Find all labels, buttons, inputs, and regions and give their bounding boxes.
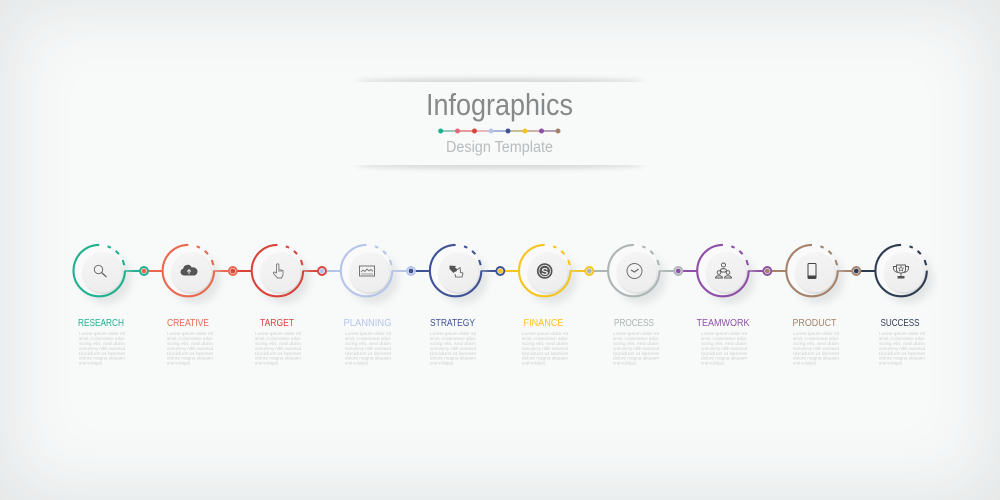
text block: amet, consectetuer adipi-: [255, 336, 301, 341]
text block: amet, consectetuer adipi-: [345, 336, 391, 341]
text block: scing elit, sed diam: [167, 341, 213, 346]
text block: Lorem ipsum dolor sit: [255, 331, 302, 336]
icon: trophy: [893, 265, 909, 278]
colour dot line: [438, 128, 560, 134]
text block: nonummy nibh euismod: [613, 346, 659, 351]
text block: scing elit, sed diam: [879, 341, 925, 346]
panel: process: [608, 245, 666, 366]
heading: TARGET: [260, 317, 294, 329]
text block: Lorem ipsum dolor sit: [345, 331, 392, 336]
text block: tincidunt ut laoreet: [255, 351, 302, 356]
text block: erat volutpat.: [167, 361, 191, 366]
heading: RESEARCH: [78, 317, 124, 329]
text block: nonummy nibh euismod: [79, 346, 125, 351]
text block: dolore magna aliquam: [255, 356, 301, 361]
ring and disc: [697, 245, 755, 304]
text block: Lorem ipsum dolor sit: [701, 331, 748, 336]
icon: strategy arrows: [450, 266, 463, 277]
text block: erat volutpat.: [879, 361, 903, 366]
text block: tincidunt ut laoreet: [167, 351, 214, 356]
panel: target: [252, 245, 309, 366]
icon: magnifier: [94, 265, 106, 277]
subtitle: Design Template: [446, 139, 553, 156]
text block: nonummy nibh euismod: [701, 346, 747, 351]
text block: amet, consectetuer adipi-: [522, 336, 568, 341]
panel: product: [786, 245, 844, 366]
ring and disc: [252, 245, 309, 304]
ring and disc: [786, 245, 844, 304]
text block: tincidunt ut laoreet: [879, 351, 926, 356]
text block: [701, 331, 748, 366]
text block: [79, 331, 126, 366]
icon: smartphone: [808, 264, 816, 278]
text block: dolore magna aliquam: [345, 356, 391, 361]
text block: [613, 331, 660, 366]
text block: scing elit, sed diam: [613, 341, 659, 346]
text block: tincidunt ut laoreet: [430, 351, 477, 356]
text block: Lorem ipsum dolor sit: [522, 331, 569, 336]
text block: scing elit, sed diam: [793, 341, 839, 346]
text block: [879, 331, 926, 366]
text block: nonummy nibh euismod: [430, 346, 476, 351]
text block: nonummy nibh euismod: [255, 346, 301, 351]
text block: scing elit, sed diam: [701, 341, 747, 346]
ring and disc: [519, 245, 577, 304]
icon: team: [716, 263, 732, 278]
text block: tincidunt ut laoreet: [79, 351, 126, 356]
panel: planning: [341, 245, 398, 366]
text block: tincidunt ut laoreet: [522, 351, 569, 356]
panel: success: [875, 245, 933, 366]
text block: Lorem ipsum dolor sit: [79, 331, 126, 336]
heading: STRATEGY: [430, 317, 475, 329]
text block: nonummy nibh euismod: [793, 346, 839, 351]
panel: finance: [519, 245, 577, 366]
icon: line chart: [360, 266, 374, 276]
text block: amet, consectetuer adipi-: [879, 336, 925, 341]
text block: [430, 331, 477, 366]
text block: [345, 331, 392, 366]
text block: nonummy nibh euismod: [167, 346, 213, 351]
icon: clock: [627, 264, 642, 278]
text block: dolore magna aliquam: [879, 356, 925, 361]
heading: CREATIVE: [167, 317, 209, 329]
text block: tincidunt ut laoreet: [613, 351, 660, 356]
top brush stroke: [359, 76, 641, 82]
panel: creative: [163, 245, 220, 366]
icon: dollar coin: S: [541, 266, 548, 278]
text block: Lorem ipsum dolor sit: [430, 331, 477, 336]
text block: Lorem ipsum dolor sit: [879, 331, 926, 336]
text block: dolore magna aliquam: [522, 356, 568, 361]
text block: Lorem ipsum dolor sit: [167, 331, 214, 336]
text block: tincidunt ut laoreet: [701, 351, 748, 356]
text block: nonummy nibh euismod: [879, 346, 925, 351]
text block: amet, consectetuer adipi-: [701, 336, 747, 341]
text block: scing elit, sed diam: [522, 341, 568, 346]
heading: TEAMWORK: [696, 317, 750, 329]
text block: erat volutpat.: [701, 361, 725, 366]
infographic canvas: [72, 76, 934, 366]
header: title block: [355, 78, 645, 169]
text block: [522, 331, 569, 366]
text block: dolore magna aliquam: [79, 356, 125, 361]
text block: scing elit, sed diam: [345, 341, 391, 346]
text block: tincidunt ut laoreet: [345, 351, 392, 356]
text block: [167, 331, 214, 366]
text block: erat volutpat.: [522, 361, 546, 366]
ring and disc: [163, 245, 220, 304]
text block: scing elit, sed diam: [255, 341, 301, 346]
heading: PRODUCT: [792, 317, 837, 329]
text block: erat volutpat.: [255, 361, 279, 366]
text block: nonummy nibh euismod: [345, 346, 391, 351]
text block: scing elit, sed diam: [430, 341, 476, 346]
text block: dolore magna aliquam: [613, 356, 659, 361]
text block: nonummy nibh euismod: [522, 346, 568, 351]
connector lines and nodes: [125, 267, 875, 275]
ring and disc: [608, 245, 666, 304]
text block: tincidunt ut laoreet: [793, 351, 840, 356]
text block: amet, consectetuer adipi-: [793, 336, 839, 341]
text block: erat volutpat.: [345, 361, 369, 366]
text block: Lorem ipsum dolor sit: [793, 331, 840, 336]
icon: pointing hand: [273, 264, 283, 278]
ring and disc: [341, 245, 398, 304]
panel: strategy: [430, 245, 488, 366]
icon: cloud upload: [181, 265, 198, 276]
text block: erat volutpat.: [430, 361, 454, 366]
text block: erat volutpat.: [793, 361, 817, 366]
text block: dolore magna aliquam: [430, 356, 476, 361]
title: Infographics: [426, 88, 573, 122]
heading: PLANNING: [344, 317, 392, 329]
text block: dolore magna aliquam: [701, 356, 747, 361]
text block: amet, consectetuer adipi-: [167, 336, 213, 341]
panel: teamwork: [696, 245, 755, 366]
panel: research: [74, 245, 131, 366]
ring and disc: [74, 245, 131, 304]
text block: [793, 331, 840, 366]
text block: scing elit, sed diam: [79, 341, 125, 346]
text block: erat volutpat.: [613, 361, 637, 366]
heading: PROCESS: [614, 317, 654, 329]
text block: Lorem ipsum dolor sit: [613, 331, 660, 336]
ring and disc: [875, 245, 933, 304]
bottom brush stroke: [359, 165, 641, 171]
heading: SUCCESS: [880, 317, 920, 329]
text block: amet, consectetuer adipi-: [79, 336, 125, 341]
text block: amet, consectetuer adipi-: [613, 336, 659, 341]
text block: dolore magna aliquam: [167, 356, 213, 361]
ring and disc: [430, 245, 488, 304]
text block: [255, 331, 302, 366]
heading: FINANCE: [524, 317, 564, 329]
text block: amet, consectetuer adipi-: [430, 336, 476, 341]
text block: erat volutpat.: [79, 361, 103, 366]
text block: dolore magna aliquam: [793, 356, 839, 361]
